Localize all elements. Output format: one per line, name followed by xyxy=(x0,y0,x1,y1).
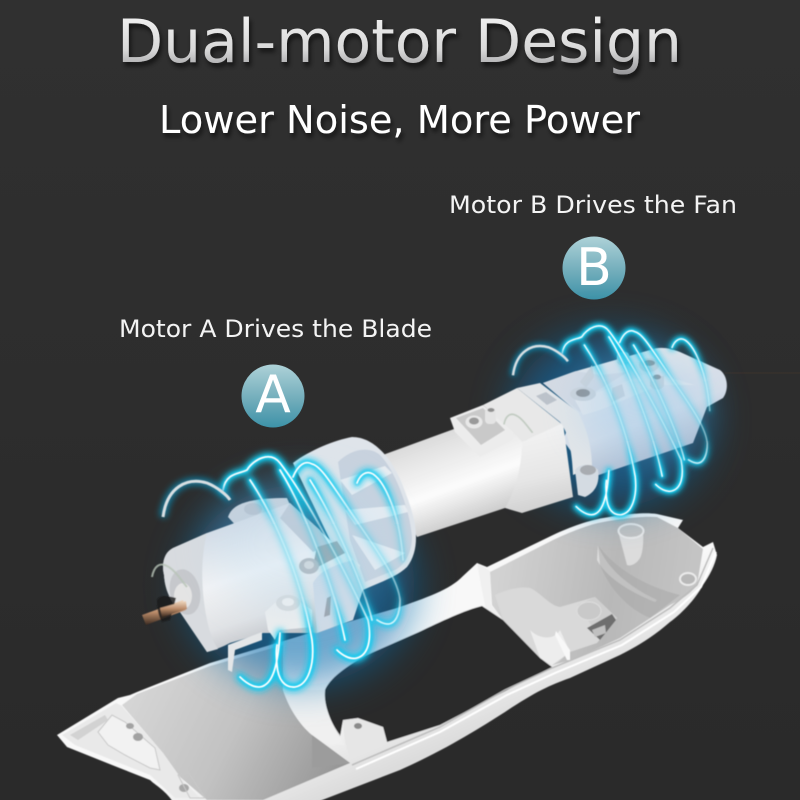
heading: Dual-motor Design: Dual-motor Design xyxy=(117,7,682,77)
outer silhouette xyxy=(57,513,717,800)
helix: motor A xyxy=(152,457,403,687)
square mount xyxy=(450,405,513,457)
lower legs xyxy=(228,632,262,672)
screw lugs xyxy=(299,558,319,574)
translucent energy field A xyxy=(210,475,390,615)
translucent energy field B xyxy=(578,355,702,455)
top ridge xyxy=(543,371,628,412)
glow: motor B xyxy=(510,332,710,508)
housing shell xyxy=(57,513,717,800)
lower post xyxy=(343,718,387,758)
studs xyxy=(570,352,664,402)
motor pin xyxy=(142,596,187,625)
screw lug xyxy=(575,465,598,497)
motor B housing xyxy=(483,348,727,513)
bracket plate xyxy=(313,560,363,633)
cylinder top face xyxy=(483,388,563,442)
left interior xyxy=(122,645,350,800)
badge: A xyxy=(242,364,304,428)
hole wall band xyxy=(283,690,344,745)
badge: B xyxy=(562,236,626,300)
rim highlights xyxy=(352,548,713,765)
front face xyxy=(163,533,218,652)
left end cap xyxy=(62,703,205,798)
glow: motor A xyxy=(185,485,415,685)
central hole xyxy=(325,606,552,742)
badge: B: B xyxy=(576,238,612,298)
screw post xyxy=(618,531,643,565)
front cylinder xyxy=(505,423,573,513)
label: motor B: Motor B Drives the Fan xyxy=(449,191,737,219)
right interior xyxy=(490,517,703,665)
collar xyxy=(517,383,592,475)
notch wall xyxy=(477,563,503,620)
motor A body xyxy=(163,498,363,672)
fan cup xyxy=(293,437,416,590)
rib xyxy=(597,545,657,602)
centre shaft xyxy=(380,400,525,537)
dual-motor assembly xyxy=(142,348,727,672)
socket xyxy=(578,597,617,640)
platform xyxy=(495,587,617,665)
badge: A: A xyxy=(255,365,291,425)
label: motor A: Motor A Drives the Blade xyxy=(119,315,432,343)
subheading: Lower Noise, More Power xyxy=(159,98,640,142)
helix: motor B xyxy=(504,326,710,515)
